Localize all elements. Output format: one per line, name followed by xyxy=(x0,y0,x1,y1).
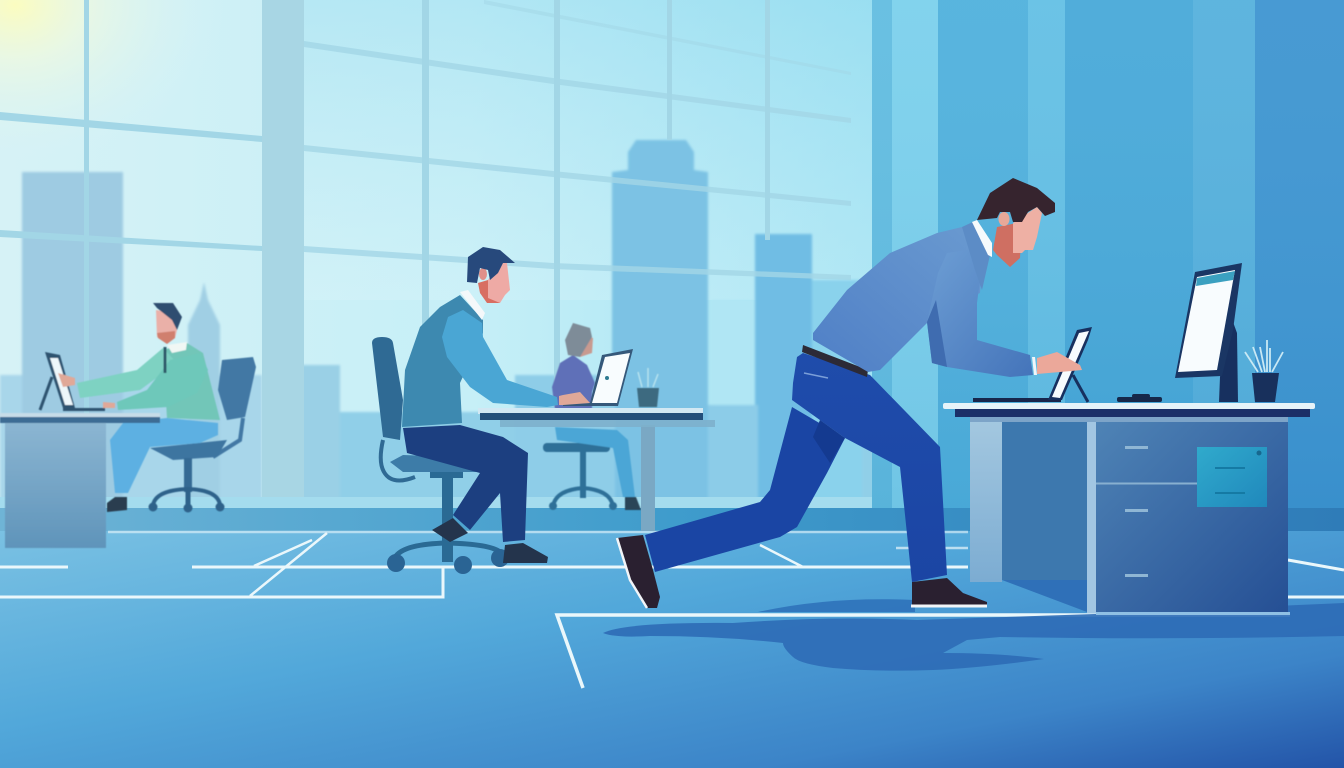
pocket xyxy=(804,373,828,378)
desk frame xyxy=(955,409,1310,417)
window frames xyxy=(0,0,880,509)
chair: middle worker xyxy=(372,337,509,574)
back leg xyxy=(645,407,845,572)
body: distant worker xyxy=(552,323,641,510)
desk left panel xyxy=(970,417,1002,582)
head: middle worker xyxy=(460,247,515,320)
drawer handles xyxy=(1125,446,1148,577)
desk knee space xyxy=(1002,422,1087,580)
sun glow xyxy=(0,0,225,165)
arm: middle worker xyxy=(442,310,558,407)
front shoe xyxy=(912,578,987,606)
hand: middle worker xyxy=(559,392,590,405)
desktop monitor xyxy=(1117,263,1242,402)
back shoe xyxy=(617,535,660,608)
front leg xyxy=(792,353,947,582)
legs: middle worker xyxy=(403,425,548,563)
middle worker xyxy=(372,247,715,574)
main desk xyxy=(943,403,1315,614)
belt xyxy=(802,345,868,377)
main man xyxy=(617,178,1082,608)
leg crease xyxy=(813,420,845,463)
desk: left worker xyxy=(0,413,160,548)
desk: middle worker xyxy=(478,408,715,531)
desk underside xyxy=(970,416,1288,422)
cup: distant worker xyxy=(637,368,659,407)
desk drawers xyxy=(1096,417,1288,613)
body: left worker xyxy=(77,303,220,512)
hand xyxy=(1037,352,1082,374)
tablet xyxy=(973,327,1092,402)
drawer divider xyxy=(1096,482,1197,484)
floor far band xyxy=(0,508,1344,531)
laptop: middle worker xyxy=(563,349,633,406)
tablet: left worker xyxy=(40,352,115,411)
background wall xyxy=(0,0,1344,520)
torso xyxy=(813,227,983,372)
city skyline xyxy=(0,140,874,512)
collar xyxy=(962,220,992,290)
floor xyxy=(0,508,1344,768)
right wall panels xyxy=(872,0,1344,512)
desk top xyxy=(943,403,1315,409)
left worker xyxy=(0,303,256,548)
arm xyxy=(927,250,1037,377)
torso: middle worker xyxy=(402,295,483,427)
distant worker xyxy=(543,323,659,510)
neck and face xyxy=(993,207,1042,267)
floor edge on desk xyxy=(1096,612,1290,615)
floor shadow xyxy=(603,603,1344,671)
window tint xyxy=(304,0,874,300)
chair: left worker xyxy=(148,357,256,512)
desk side strip xyxy=(1087,417,1096,613)
floor lines xyxy=(0,532,1344,688)
blue folder xyxy=(1197,447,1267,507)
chair: distant worker xyxy=(543,443,617,510)
hair xyxy=(977,178,1055,222)
plant pot xyxy=(1245,340,1283,402)
foot shadow xyxy=(758,599,915,612)
